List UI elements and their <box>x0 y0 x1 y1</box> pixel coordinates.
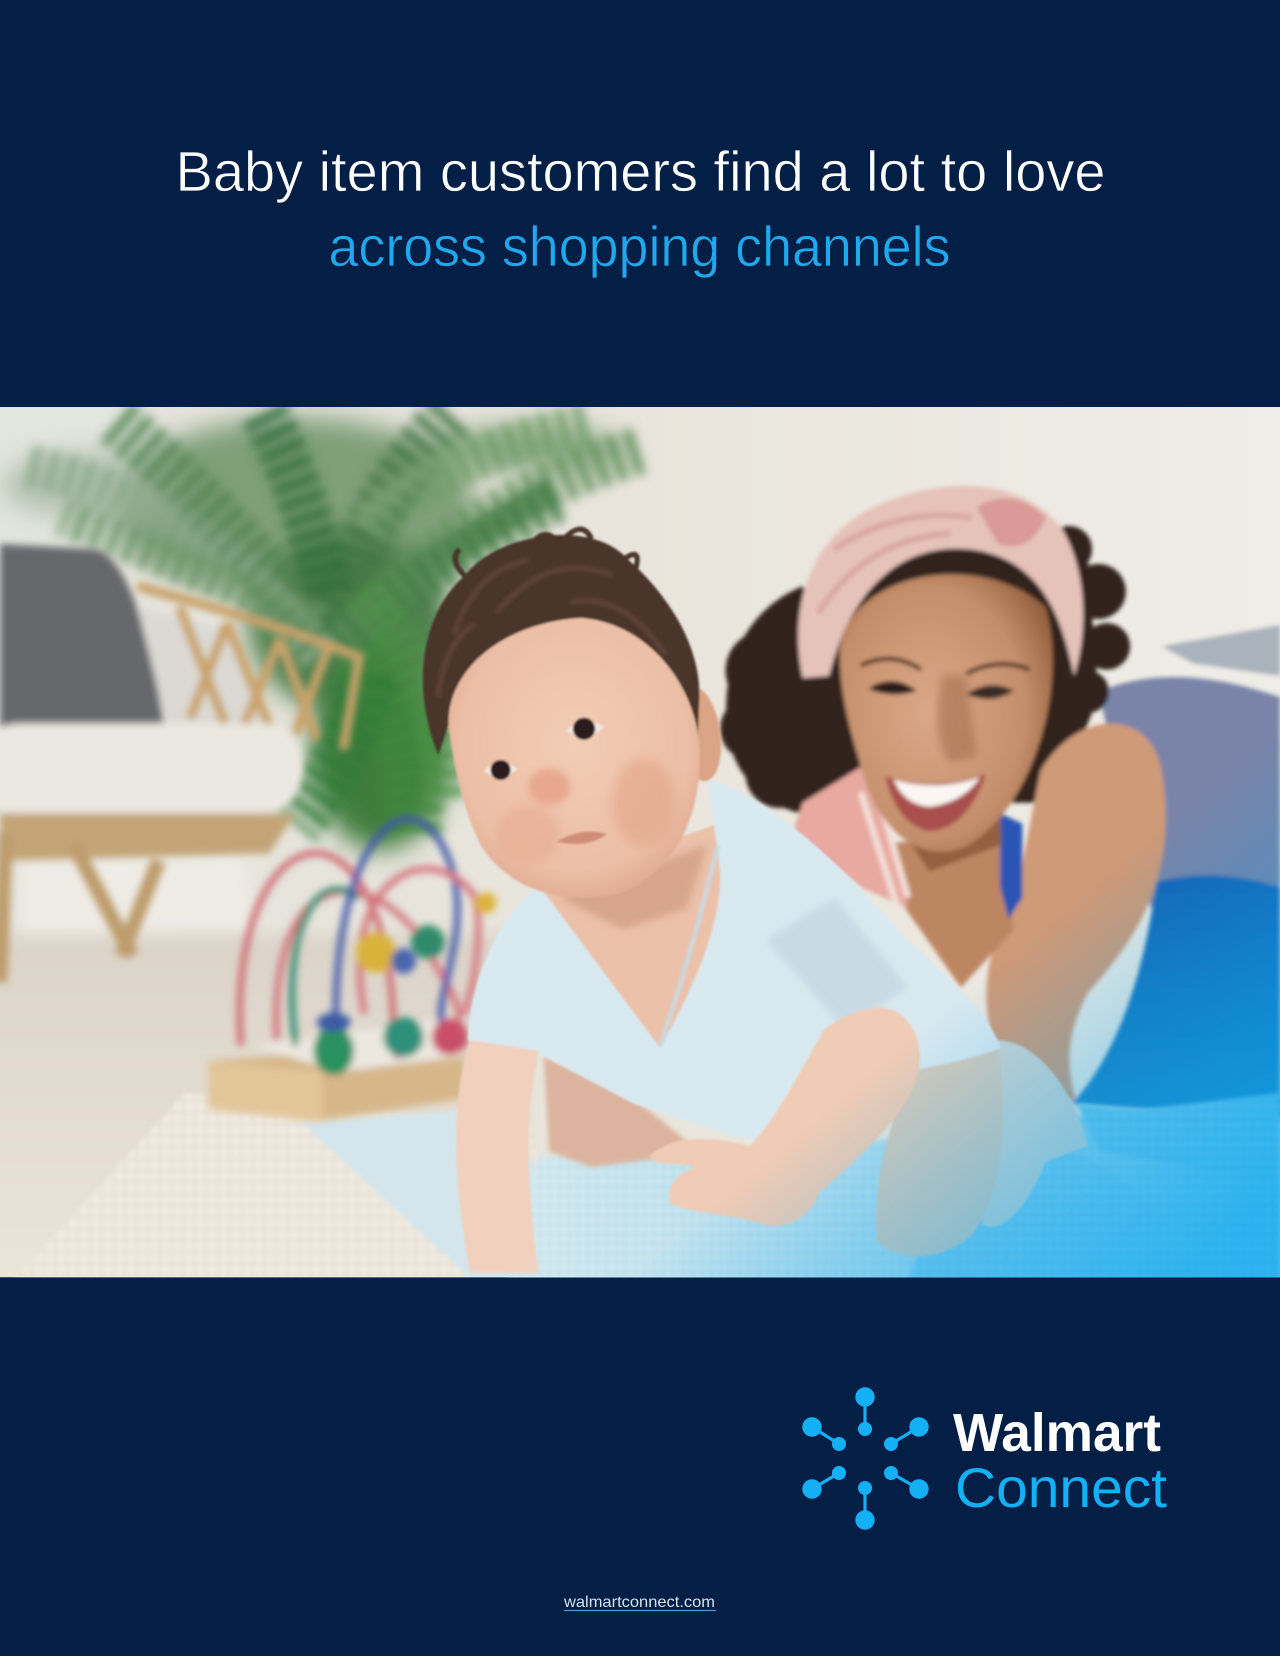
photo: baby and mother <box>0 391 1280 1299</box>
title <box>176 140 1106 279</box>
right arm and hand <box>650 1008 920 1226</box>
shirt <box>468 779 1001 1146</box>
chest <box>893 838 1014 990</box>
patterned textile <box>1162 625 1280 676</box>
blue gradient overlay <box>0 407 1280 1278</box>
toy: bead maze <box>208 819 496 1122</box>
baby cheek and nose shade <box>496 805 560 864</box>
neck <box>912 816 1004 872</box>
plant <box>0 412 644 850</box>
face <box>840 574 1053 852</box>
logo word: Walmart: Walmart <box>953 1403 1161 1463</box>
logo: Walmart Connect <box>802 1387 1167 1530</box>
eyes <box>868 681 917 694</box>
sofa cushion <box>1098 677 1280 908</box>
baby <box>423 529 1088 1273</box>
icon: spark network <box>802 1387 929 1530</box>
blanket <box>507 1093 1280 1283</box>
mother <box>720 486 1280 1119</box>
rug <box>13 1093 536 1278</box>
blue strap <box>1000 813 1022 919</box>
smile <box>885 774 986 831</box>
thigh <box>876 1046 1003 1256</box>
baby hair <box>423 535 699 760</box>
chest skin <box>544 824 721 1048</box>
baby ear <box>696 688 722 782</box>
baby face <box>448 618 700 898</box>
title line 2: across shopping channels <box>328 215 950 279</box>
nose shadow <box>937 676 977 763</box>
blue body <box>1072 875 1280 1119</box>
pink top <box>792 760 908 908</box>
left arm <box>456 1040 539 1273</box>
baby mouth <box>557 831 607 844</box>
hair <box>720 523 1130 815</box>
mother's hand <box>544 1056 686 1167</box>
logo word: Connect: Connect <box>955 1456 1167 1519</box>
arm and shoulder <box>986 723 1166 1104</box>
headband <box>798 486 1083 678</box>
far leg <box>977 1040 1088 1227</box>
chair <box>0 544 359 982</box>
footer link: walmartconnect.com <box>563 1594 715 1611</box>
baby nose <box>528 769 570 805</box>
baby eyes <box>484 762 517 777</box>
title line 1: Baby item customers find a lot to love <box>176 140 1106 204</box>
